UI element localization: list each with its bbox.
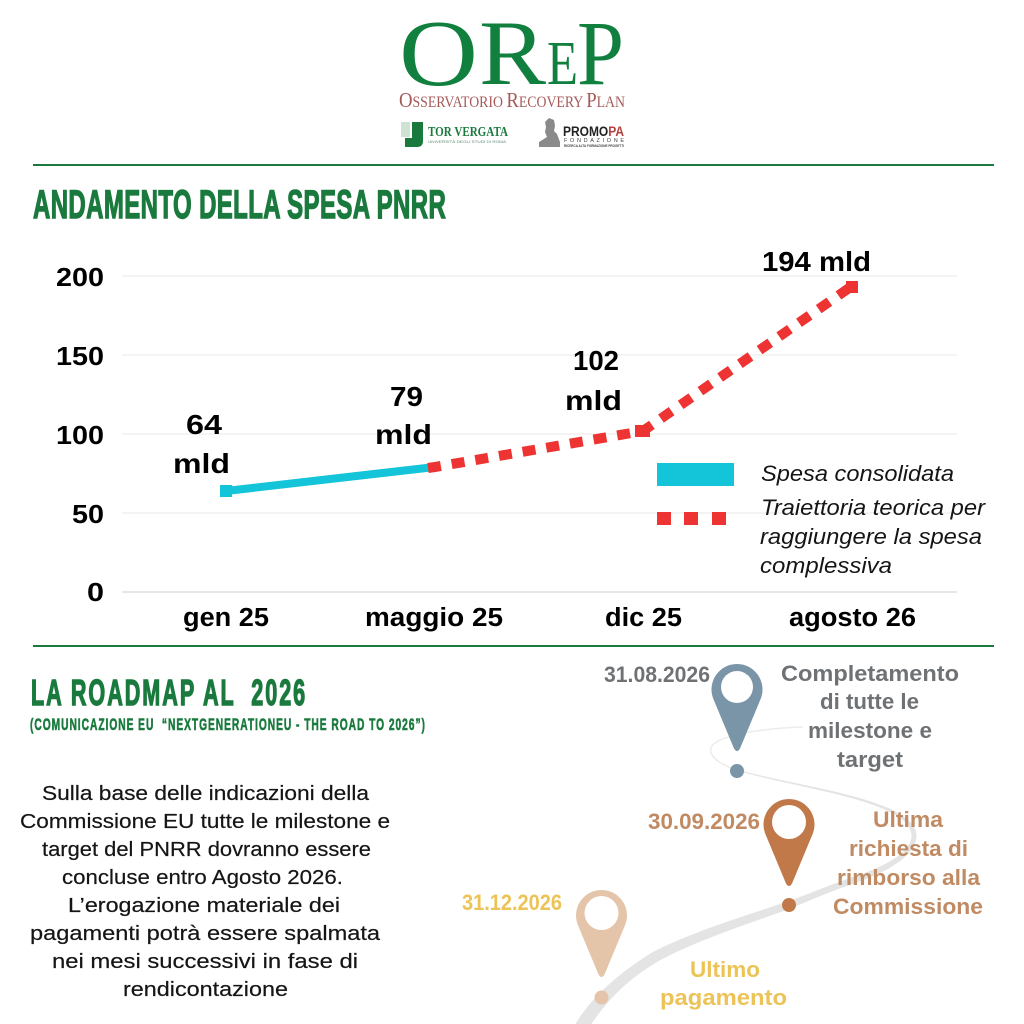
roadmap description text: Sulla base delle indicazioni della — [42, 782, 370, 805]
date: 31.08.2026 — [604, 662, 710, 687]
Promo PA logo: PROMOPA — [563, 124, 624, 139]
milestone: 30.09.2026 — [648, 799, 983, 919]
data label: 102 mld: 102 — [573, 345, 619, 376]
logo block — [399, 2, 625, 148]
x axis labels: gen 25 — [183, 604, 269, 632]
legend: Traiettoria teorica per — [761, 495, 987, 520]
x axis labels — [183, 604, 916, 632]
data label: 79 mld: 79 — [390, 381, 423, 412]
roadmap description text: concluse entro Agosto 2026. — [62, 866, 343, 889]
Promo PA logo: RICERCA ALTA FORMAZIONE PROGETTI — [564, 144, 624, 148]
roadmap description text: nei mesi successivi in fase di — [52, 950, 358, 973]
roadmap description text: L’erogazione materiale dei — [68, 894, 340, 917]
OREP wordmark: R — [479, 2, 547, 104]
Tor Vergata logo — [401, 122, 509, 147]
data label: 79 mld: mld — [375, 419, 432, 450]
date: 31.12.2026 — [462, 890, 562, 915]
heading: la roadmap al 2026: LA ROADMAP AL 2026 — [31, 673, 305, 713]
roadmap description text — [20, 782, 390, 1001]
legend: complessiva — [760, 553, 892, 578]
description: Ultima — [873, 807, 943, 832]
description — [781, 661, 959, 772]
legend: raggiungere la spesa — [760, 524, 982, 549]
heading: andamento della spesa: ANDAMENTO DELLA SPESA PNRR — [33, 182, 446, 226]
OREP wordmark — [399, 2, 624, 106]
x axis labels: maggio 25 — [365, 604, 503, 632]
data label: 79 mld — [375, 381, 432, 450]
Promo PA logo — [539, 118, 624, 148]
x axis labels: agosto 26 — [789, 604, 916, 632]
description: Commissione — [833, 894, 983, 919]
roadmap subtitle: (COMUNICAZIONE EU “NEXTGENERATIONEU - THE ROAD TO 2026”) — [30, 716, 425, 734]
description — [660, 957, 787, 1010]
description: richiesta di — [849, 836, 968, 861]
data label: 64 mld — [173, 409, 230, 479]
Tor Vergata logo: TOR VERGATA — [428, 125, 509, 140]
description: Ultimo — [690, 957, 760, 982]
theoretical trajectory line — [428, 281, 858, 468]
x axis labels: dic 25 — [605, 604, 682, 632]
OREP wordmark: O — [399, 2, 478, 106]
data label: 102 mld: mld — [565, 385, 622, 416]
data label: 64 mld: 64 — [186, 409, 222, 440]
description: rimborso alla — [837, 865, 980, 890]
pin: blue — [712, 664, 762, 778]
y axis labels — [56, 264, 104, 607]
line chart — [56, 246, 987, 632]
consolidated spending line — [220, 467, 435, 497]
roadmap description text: rendicontazione — [123, 978, 288, 1001]
OREP wordmark: P — [577, 2, 624, 104]
data label: 102 mld — [565, 345, 622, 416]
description: di tutte le — [820, 689, 919, 714]
data label: 194 mld: 194 mld — [762, 246, 871, 277]
description: Completamento — [781, 661, 959, 686]
description: pagamento — [660, 985, 787, 1010]
description: milestone e — [808, 718, 932, 743]
legend: Spesa consolidata — [761, 461, 954, 486]
description: target — [837, 747, 904, 772]
Promo PA logo: FONDAZIONE — [564, 138, 624, 144]
data label: 64 mld: mld — [173, 448, 230, 479]
y axis labels: 50 — [72, 501, 104, 529]
description — [833, 807, 983, 919]
logo subtitle: OSSERVATORIO RECOVERY PLAN — [399, 88, 625, 112]
milestone: 31.12.2026 — [462, 890, 787, 1010]
Tor Vergata logo: UNIVERSITÀ DEGLI STUDI DI ROMA — [428, 139, 506, 144]
pin: peach — [576, 890, 627, 1004]
date: 30.09.2026 — [648, 809, 760, 834]
y axis labels: 100 — [56, 422, 104, 450]
OREP wordmark: E — [547, 30, 578, 98]
y axis labels: 0 — [87, 579, 104, 607]
milestone: 31.08.2026 — [604, 661, 959, 778]
legend — [657, 461, 987, 578]
pin: orange — [764, 799, 814, 912]
winding road — [572, 727, 917, 1024]
roadmap description text: pagamenti potrà essere spalmata — [30, 922, 381, 945]
roadmap description text: Commissione EU tutte le milestone e — [20, 810, 390, 833]
y axis labels: 150 — [56, 343, 104, 371]
roadmap description text: target del PNRR dovranno essere — [42, 838, 371, 861]
y axis labels: 200 — [56, 264, 104, 292]
